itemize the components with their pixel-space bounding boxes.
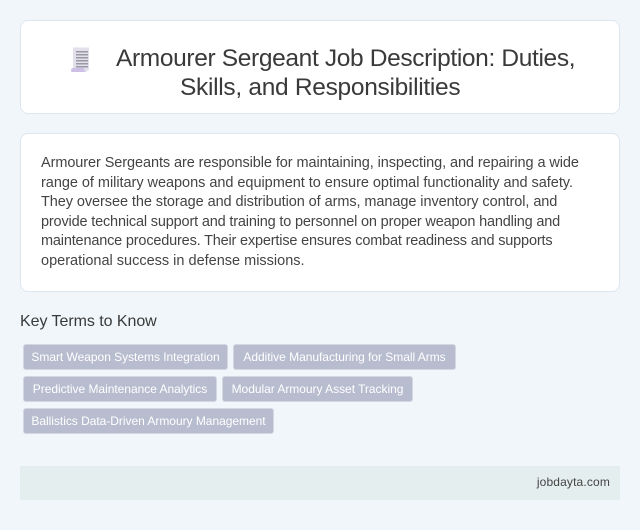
tag: modular armoury	[222, 376, 413, 402]
footer source text: jobdayta.com	[537, 475, 610, 489]
description text: range of military weapons and equipment to ensure optimal functionality and safety.	[41, 175, 573, 191]
footer bar	[20, 466, 620, 500]
tag: modular armoury: Modular Armoury Asset Tracking	[232, 382, 403, 396]
description text: provide technical support and training to personnel on proper weapon handling and	[41, 214, 560, 230]
description text	[41, 155, 579, 269]
tag: predictive maintenance	[23, 376, 217, 402]
description text: maintenance procedures. Their expertise ensures combat readiness and supports	[41, 233, 552, 249]
tag: ballistics data: Ballistics Data-Driven Armoury Management	[31, 414, 266, 428]
title heading: Armourer Sergeant Job Description: Duties,	[116, 45, 575, 72]
tag: additive manufacturing: Additive Manufacturing for Small Arms	[243, 350, 446, 364]
title heading	[116, 45, 575, 101]
tag: predictive maintenance: Predictive Maintenance Analytics	[33, 382, 207, 396]
tag: ballistics data	[23, 408, 274, 434]
tag: smart weapon systems integration: Smart Weapon Systems Integration	[31, 350, 220, 364]
description text: Armourer Sergeants are responsible for maintaining, inspecting, and repairing a wide	[41, 155, 579, 171]
tag: smart weapon systems integration	[23, 344, 228, 370]
title heading: Skills, and Responsibilities	[180, 74, 460, 101]
title panel	[20, 20, 620, 114]
key terms heading: Key Terms to Know	[20, 313, 157, 330]
description text: operational success in defense missions.	[41, 253, 305, 269]
description text: They oversee the storage and distribution of arms, manage inventory control, and	[41, 194, 557, 210]
tag: additive manufacturing	[233, 344, 456, 370]
icon: paper scroll	[71, 48, 89, 72]
description panel	[20, 133, 620, 292]
